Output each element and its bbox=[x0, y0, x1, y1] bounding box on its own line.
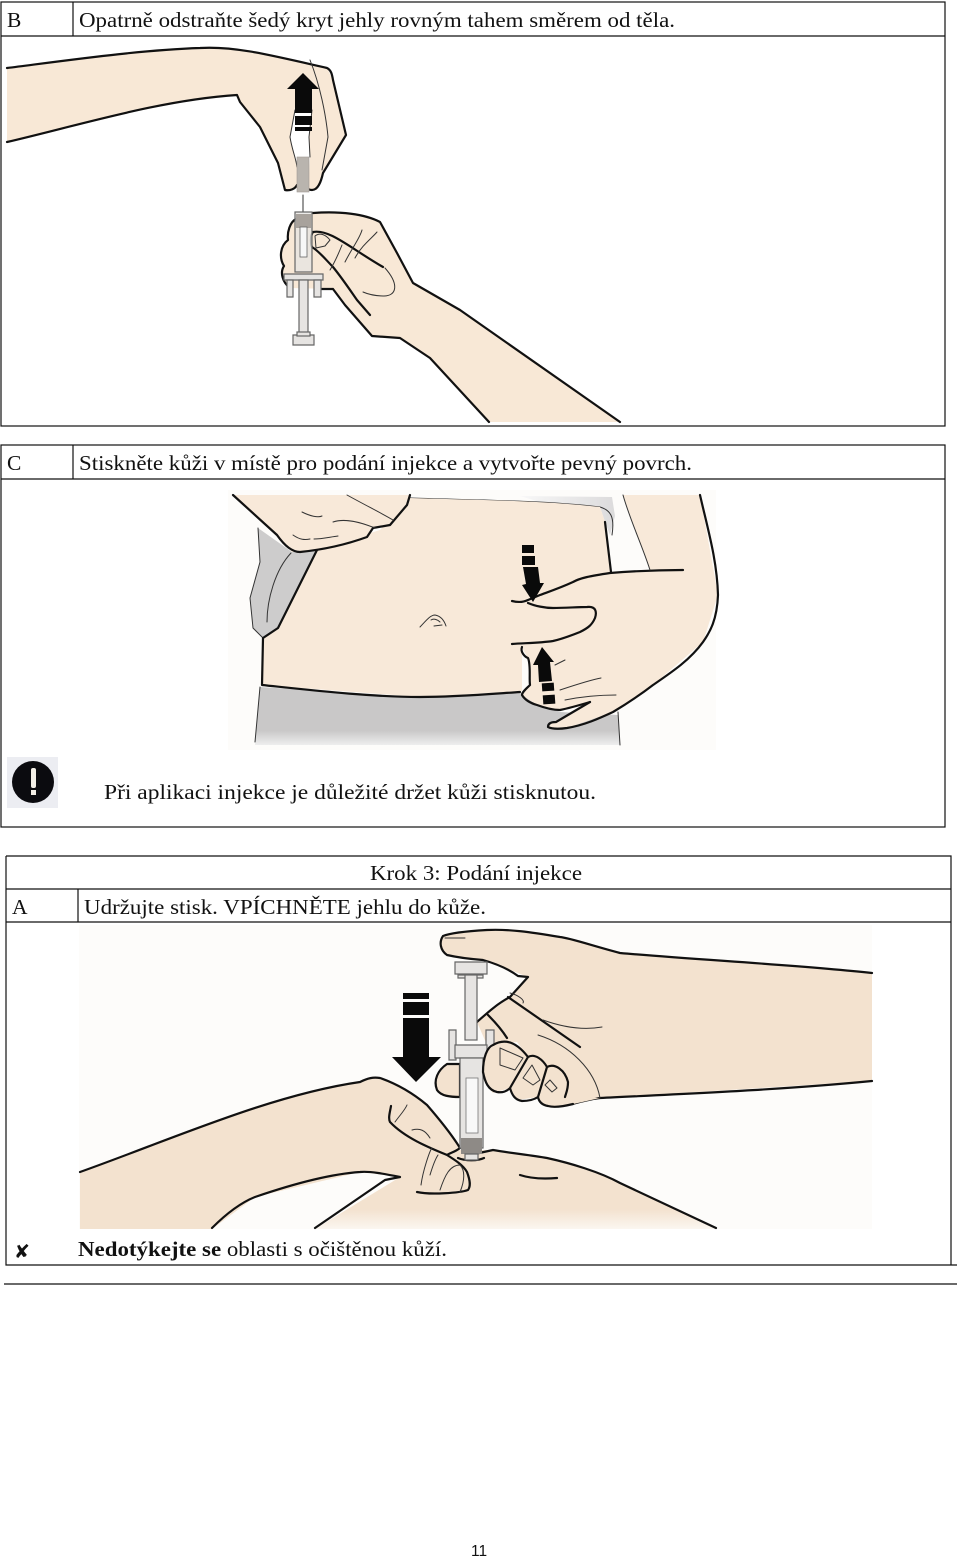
panel: step C bbox=[1, 445, 945, 827]
step label A: A bbox=[12, 895, 28, 919]
icon: down arrow bbox=[392, 993, 441, 1082]
icon: up arrow bbox=[287, 73, 319, 131]
warning: do not touch: Nedotýkejte se oblasti s očištěnou kůží. bbox=[78, 1237, 447, 1261]
panel: step B bbox=[1, 2, 945, 426]
warning text: Při aplikaci injekce je důležité držet kůži stisknutou. bbox=[104, 780, 596, 804]
icon: warning bbox=[7, 757, 58, 808]
instruction C: Stiskněte kůži v místě pro podání injekce a vytvořte pevný povrch. bbox=[79, 451, 692, 475]
icon: down arrow bbox=[522, 545, 544, 602]
panel: step 3 A bbox=[6, 856, 957, 1265]
trousers bbox=[255, 687, 620, 745]
abdomen bbox=[315, 1150, 716, 1229]
table frame: step C bbox=[1, 445, 945, 827]
icon: up arrow bbox=[533, 647, 555, 704]
needle cap bbox=[297, 157, 309, 192]
left-hand finger behind syringe bbox=[436, 1064, 460, 1097]
right hand bbox=[441, 930, 872, 1104]
illustration: removing needle cap bbox=[7, 48, 620, 422]
navel bbox=[420, 615, 446, 627]
syringe bbox=[449, 962, 494, 1160]
illustration: pinching abdomen skin bbox=[228, 490, 718, 750]
grey shirt bbox=[250, 528, 317, 638]
syringe bbox=[284, 195, 323, 345]
table frame: step 3 bbox=[6, 856, 957, 1265]
step label C: C bbox=[7, 451, 21, 475]
left hand bbox=[233, 495, 410, 552]
heading: step 3: Krok 3: Podání injekce bbox=[370, 861, 582, 885]
torso bbox=[262, 498, 611, 697]
table frame: step B bbox=[1, 2, 945, 426]
upper hand pulling cap bbox=[7, 48, 346, 190]
right arm and hand bbox=[512, 495, 718, 729]
illustration: inserting needle bbox=[79, 925, 872, 1229]
right-hand fingers bbox=[483, 1042, 600, 1107]
step label B: B bbox=[7, 8, 21, 32]
instruction A: Udržujte stisk. VPÍCHNĚTE jehlu do kůže. bbox=[84, 895, 486, 919]
instruction B: Opatrně odstraňte šedý kryt jehly rovným tahem směrem od těla. bbox=[79, 8, 675, 32]
icon: cross: ✘ bbox=[14, 1241, 30, 1263]
lower hand holding syringe bbox=[281, 212, 620, 422]
left hand bbox=[80, 1078, 470, 1229]
